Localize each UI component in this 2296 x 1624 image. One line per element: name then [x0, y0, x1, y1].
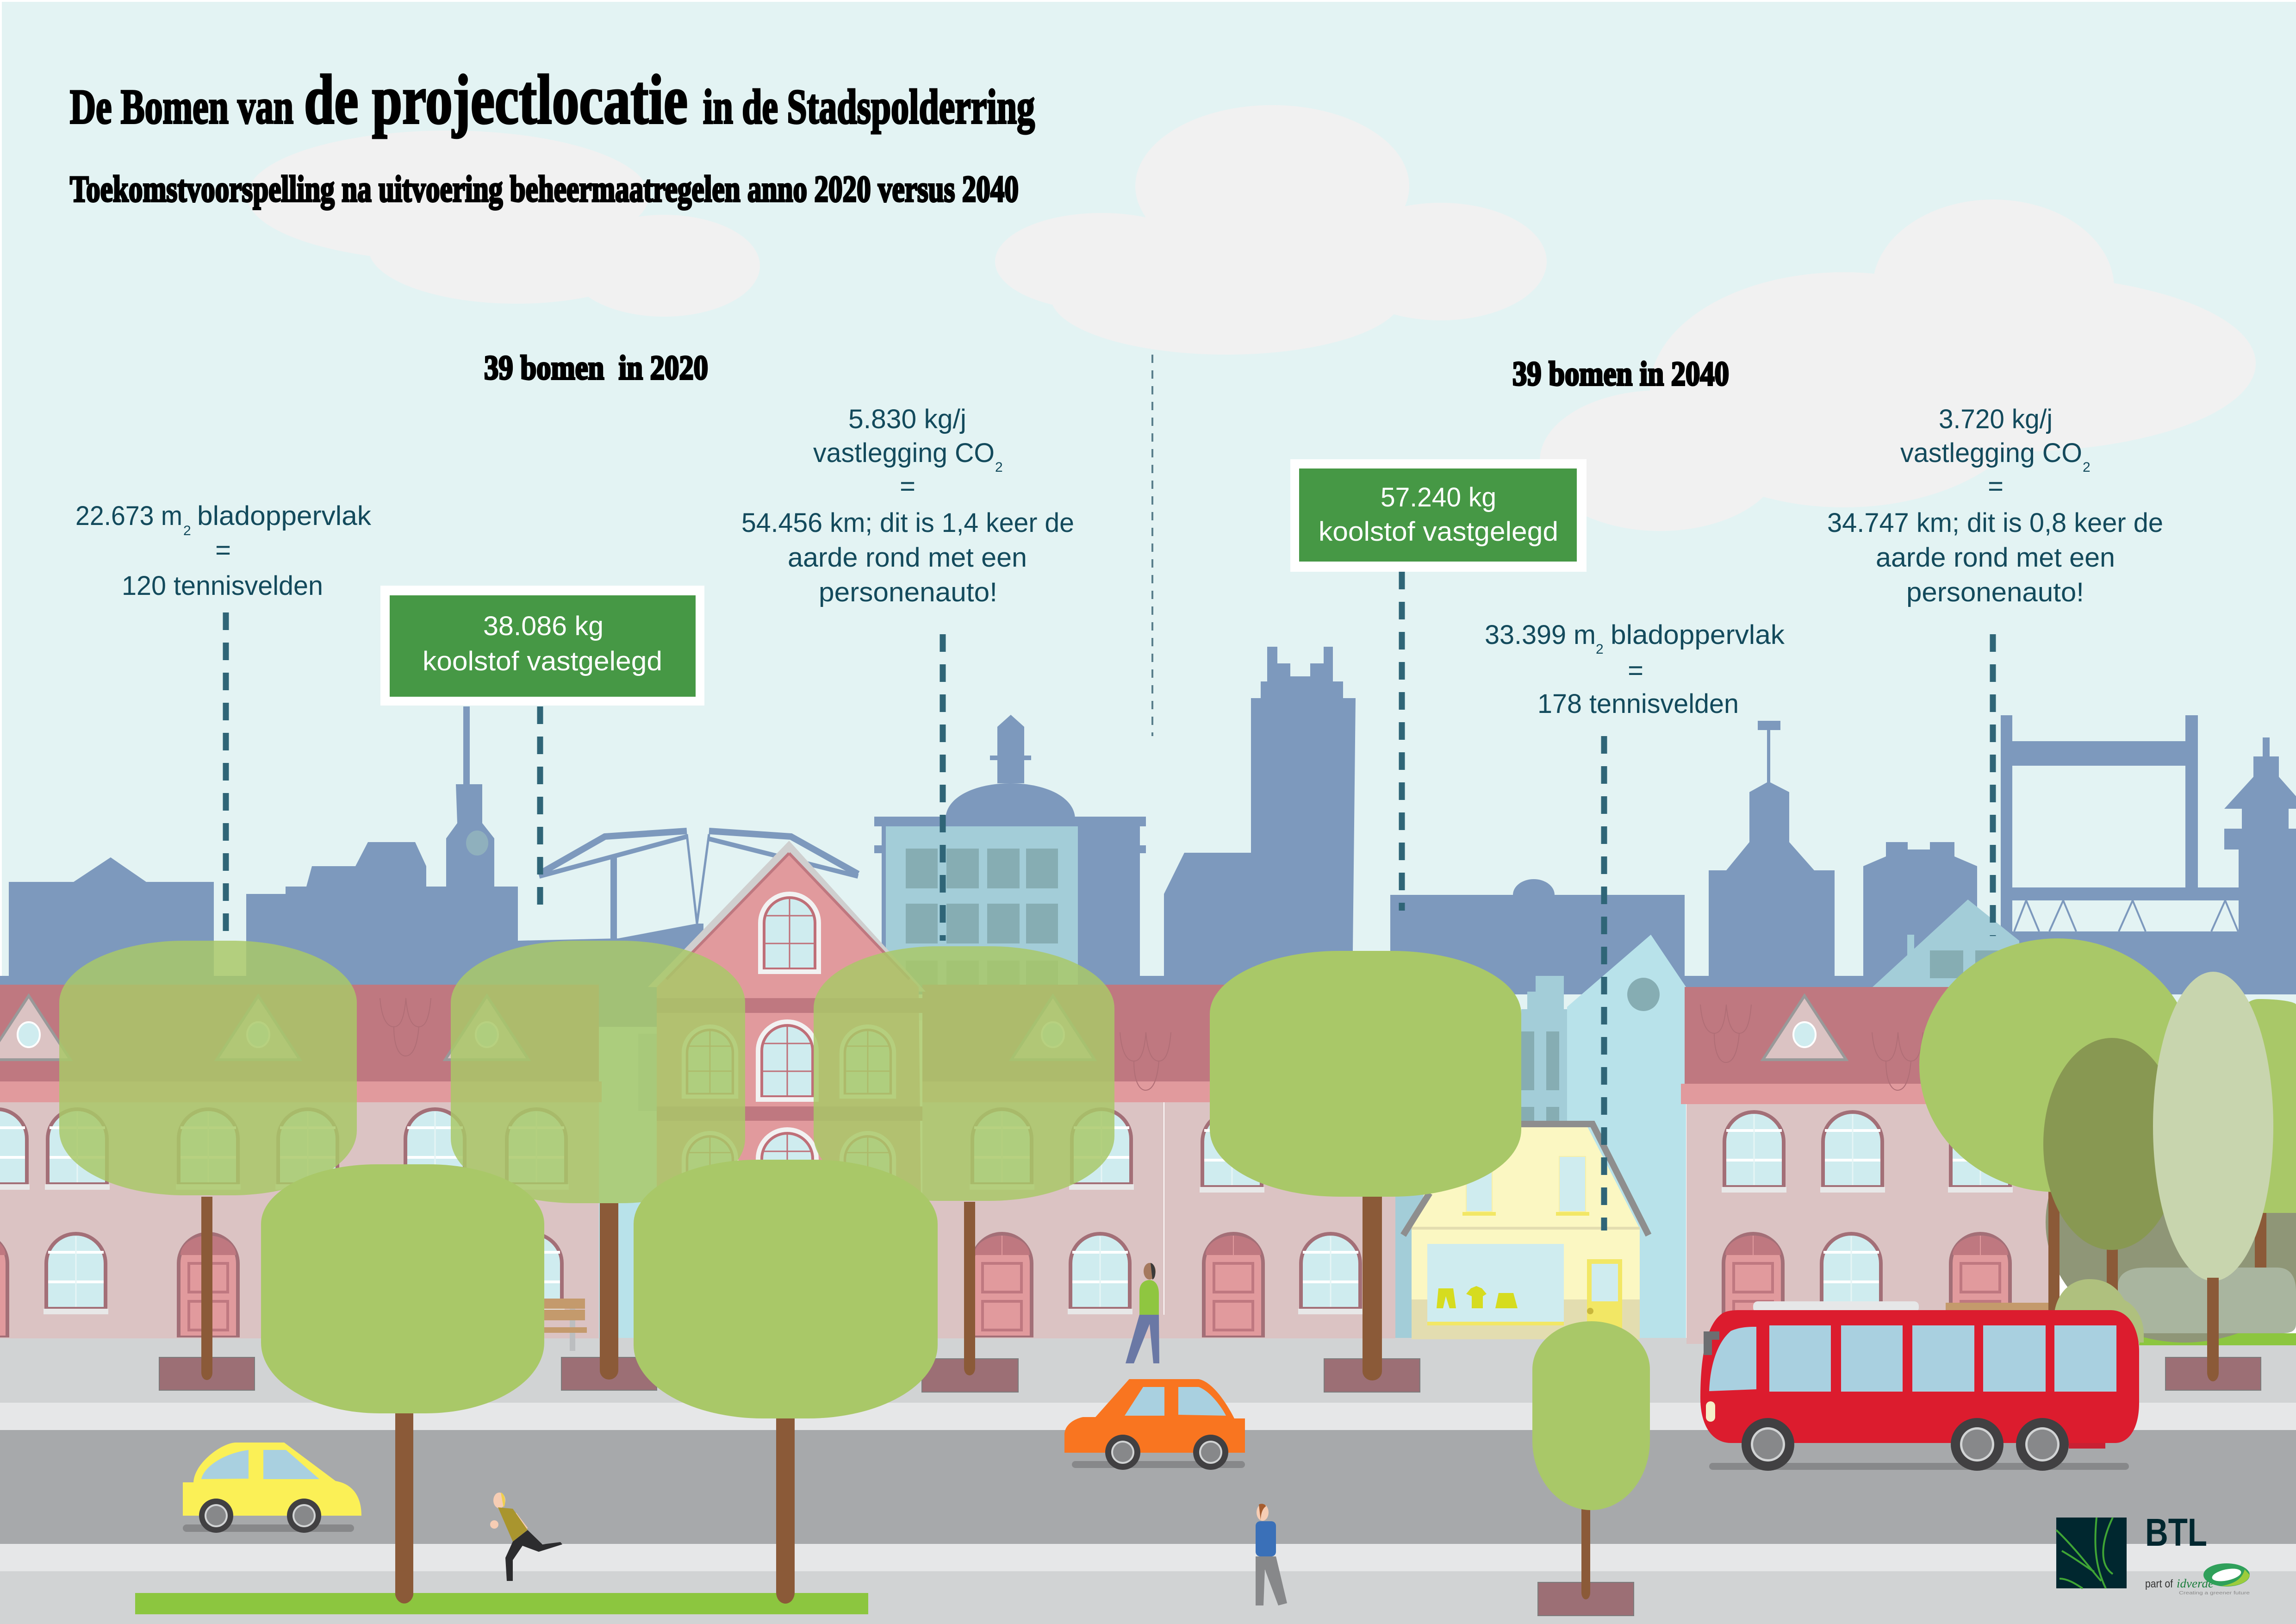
text: leaf area 2020 [75, 501, 372, 601]
text: leaf area 2020: 22.673 m [75, 501, 182, 531]
text: leaf area 2020: bladoppervlak [197, 501, 372, 531]
text: leaf area 2040: = [1628, 656, 1643, 686]
house row right [1681, 987, 2056, 1344]
tree group right [1919, 938, 2296, 1381]
text: CO2 2020: aarde rond met een [788, 543, 1027, 573]
tree 2040 small [1532, 1321, 1650, 1599]
text: leaf area 2020: 2 [183, 523, 191, 538]
person: runner [490, 1493, 562, 1581]
callout: carbon 2020 [380, 586, 704, 706]
dashed leader lines [226, 572, 1993, 1230]
cloud left [247, 131, 760, 317]
person: man in blue shirt [1256, 1504, 1287, 1605]
text: CO2 2040: 3.720 kg/j [1939, 404, 2053, 434]
text: CO2 2020 [741, 404, 1074, 607]
text: CO2 2040: 2 [2083, 460, 2091, 475]
skyline [0, 647, 2296, 1028]
title: De Bomen van [70, 80, 293, 134]
title: in de Stadspolderring [703, 80, 1035, 134]
tree 2040 large [1210, 951, 1521, 1380]
callout: carbon 2040: 57.240 kg [1381, 482, 1496, 512]
central gabled building [648, 841, 926, 1339]
sky background [2, 2, 2296, 1020]
text: CO2 2040: vastlegging CO [1900, 438, 2082, 468]
callout: carbon 2020: 38.086 kg [483, 611, 604, 641]
house row middle [922, 985, 1395, 1338]
text: CO2 2020: 2 [995, 460, 1003, 475]
text: leaf area 2040: 2 [1596, 642, 1604, 657]
logo: BTL [2056, 1511, 2250, 1596]
text: CO2 2020: personenauto! [819, 577, 997, 607]
trees foreground 2020 [261, 1160, 938, 1604]
planters [159, 1357, 2261, 1616]
centre divider [1151, 355, 1153, 736]
heading 2040: 39 bomen in 2040 [1512, 355, 1729, 393]
text: CO2 2020: vastlegging CO [813, 438, 995, 468]
title [70, 61, 1035, 138]
trees 2020 translucent [59, 941, 1114, 1380]
cloud centre [995, 105, 1547, 355]
heading 2020: 39 bomen in 2020 [484, 349, 708, 387]
text: leaf area 2020: = [215, 535, 231, 565]
callout: carbon 2040 [1290, 459, 1587, 572]
title: de projectlocatie [304, 61, 688, 138]
text: leaf area 2040: 178 tennisvelden [1537, 689, 1739, 719]
house row left [0, 985, 602, 1338]
subtitle: Toekomstvoorspelling na uitvoering beheermaatregelen anno 2020 versus 2040 [70, 169, 1019, 210]
callout: carbon 2020: koolstof vastgelegd [423, 646, 662, 676]
orange car [1064, 1379, 1245, 1470]
text: leaf area 2040 [1485, 620, 1785, 719]
yellow shop [1403, 1124, 1649, 1339]
street [0, 1338, 2296, 1624]
text: CO2 2040: = [1988, 471, 2004, 501]
text: CO2 2020: 5.830 kg/j [848, 404, 966, 434]
text: leaf area 2040: 33.399 m [1485, 620, 1596, 650]
text: leaf area 2020: 120 tennisvelden [122, 571, 323, 601]
person: man in green shirt [1126, 1263, 1159, 1363]
logo: BTL: idverde [2177, 1577, 2214, 1590]
light blue buildings [599, 826, 2019, 1338]
text: CO2 2040 [1827, 404, 2163, 607]
grass strip [135, 1593, 868, 1614]
icon: clothes in shop window [1437, 1286, 1518, 1308]
text: CO2 2040: 34.747 km; dit is 0,8 keer de [1827, 508, 2163, 538]
cloud right [1540, 200, 2256, 531]
logo: BTL: BTL [2145, 1511, 2207, 1554]
text: CO2 2020: = [900, 471, 915, 501]
text: leaf area 2040: bladoppervlak [1611, 620, 1785, 650]
yellow car [183, 1443, 361, 1533]
bus [1700, 1301, 2139, 1471]
text: CO2 2040: aarde rond met een [1876, 543, 2115, 573]
logo: BTL: part of [2145, 1578, 2173, 1590]
text: CO2 2040: personenauto! [1906, 577, 2084, 607]
callout: carbon 2040: koolstof vastgelegd [1319, 517, 1558, 547]
logo: BTL: Creating a greener future [2179, 1591, 2250, 1596]
text: CO2 2020: 54.456 km; dit is 1,4 keer de [741, 508, 1074, 538]
bench [544, 1299, 587, 1351]
